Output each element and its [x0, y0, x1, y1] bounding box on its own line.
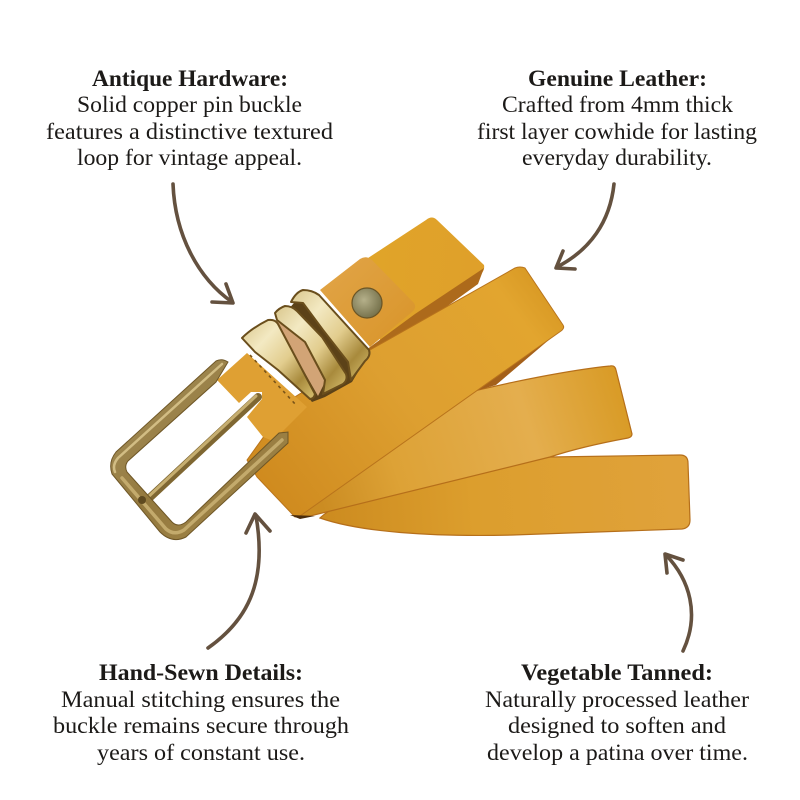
callout: vegetable tanned: designed to soften and	[508, 713, 727, 738]
strap: third layer	[300, 366, 632, 516]
strap: lowest layer tail	[320, 455, 690, 535]
arrow: to vegetable tanned tail	[665, 554, 691, 651]
buckle loop tab with stitching	[217, 353, 307, 441]
callout: vegetable tanned: Naturally processed leather	[485, 687, 749, 712]
strap: second layer	[247, 267, 564, 517]
callout: vegetable tanned: Vegetable Tanned:	[521, 660, 713, 685]
callout: antique hardware: loop for vintage appeal.	[77, 145, 302, 170]
arrow: to genuine leather	[556, 184, 614, 269]
callout: vegetable tanned	[485, 660, 749, 765]
arrow: to buckle hardware	[173, 184, 233, 303]
strap end: upper layer	[365, 218, 484, 356]
buckle frame	[111, 360, 288, 540]
callout: vegetable tanned: develop a patina over time.	[487, 740, 748, 765]
callout: antique hardware: features a distinctive textured	[46, 119, 334, 144]
belt illustration	[111, 218, 690, 540]
callout: hand-sewn details	[53, 660, 350, 765]
callout: hand-sewn details: buckle remains secure through	[53, 713, 350, 738]
callout: hand-sewn details: Hand-Sewn Details:	[99, 660, 303, 685]
callout: hand-sewn details: Manual stitching ensures the	[61, 687, 340, 712]
callout: genuine leather: everyday durability.	[522, 145, 712, 170]
leather loop with rivet	[320, 257, 415, 347]
callout: hand-sewn details: years of constant use.	[97, 740, 305, 765]
buckle pin	[144, 396, 258, 503]
callout: genuine leather: first layer cowhide for lasting	[477, 119, 758, 144]
callout: antique hardware: Antique Hardware:	[92, 66, 288, 91]
keeper 1	[242, 320, 315, 399]
strap: dark fold junction	[290, 515, 315, 519]
callout: genuine leather: Genuine Leather:	[528, 66, 707, 91]
strap: inner shadow	[445, 320, 564, 396]
callout: genuine leather: Crafted from 4mm thick	[502, 92, 734, 117]
keeper 3	[291, 290, 370, 380]
decorative keepers	[242, 290, 370, 402]
callout: antique hardware	[46, 66, 334, 170]
callout: antique hardware: Solid copper pin buckle	[77, 92, 302, 117]
callout: genuine leather	[477, 66, 758, 170]
keeper 2	[275, 306, 347, 394]
rivet	[352, 288, 382, 318]
arrow: to hand-sewn stitching	[208, 514, 270, 648]
